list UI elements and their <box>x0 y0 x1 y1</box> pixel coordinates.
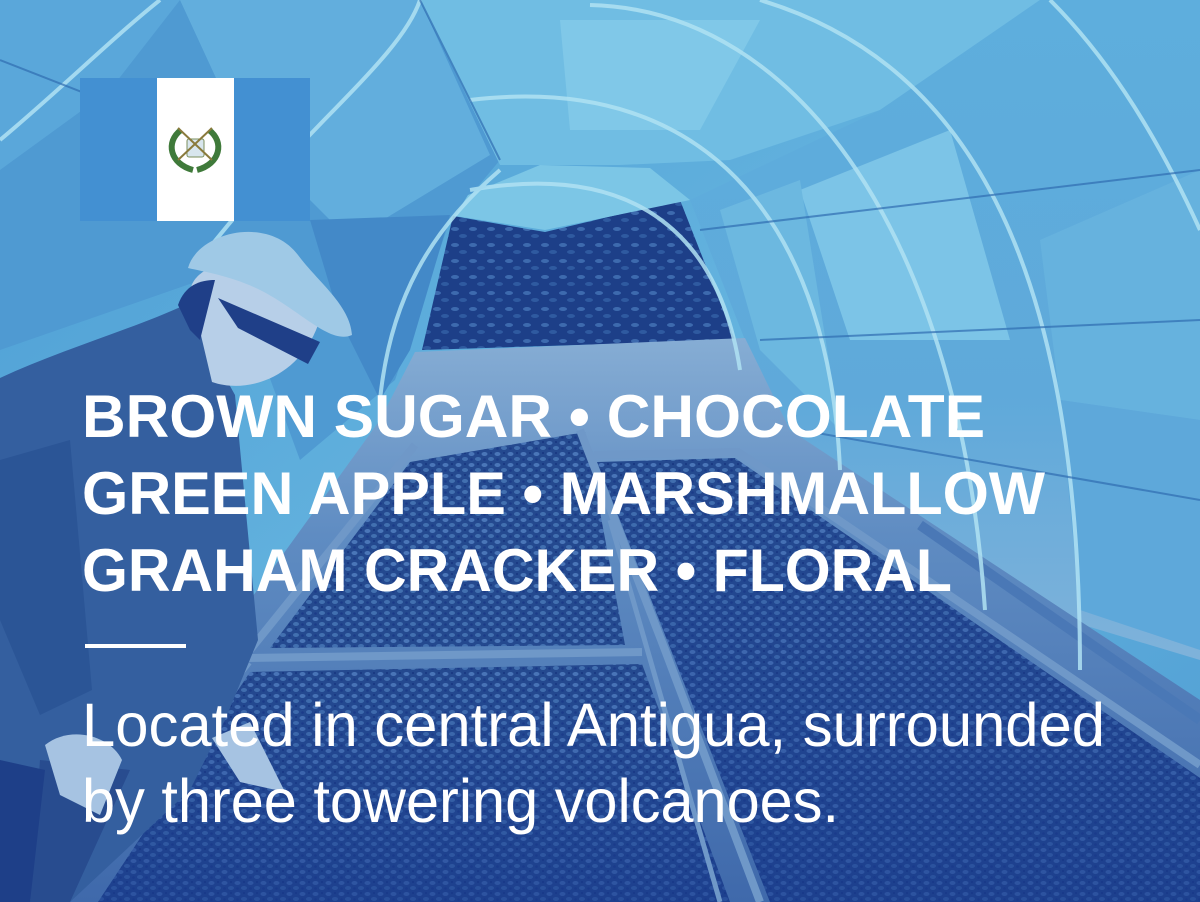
tunnel end opening with trees <box>422 200 735 350</box>
tunnel hoops <box>0 0 1200 670</box>
drying beds <box>270 432 625 648</box>
description text <box>82 691 1105 835</box>
bed frames <box>246 430 1200 902</box>
plastic tunnel right panels <box>690 0 1200 660</box>
flavor notes heading: GRAHAM CRACKER • FLORAL <box>82 537 952 604</box>
worker figure <box>0 232 352 902</box>
ground beyond the beds <box>60 338 1200 902</box>
icon: coat of arms <box>172 128 218 170</box>
divider line <box>85 644 186 648</box>
description text: Located in central Antigua, surrounded <box>82 691 1105 759</box>
flavor notes heading: GREEN APPLE • MARSHMALLOW <box>82 460 1045 527</box>
flag of Guatemala <box>80 78 310 221</box>
description text: by three towering volcanoes. <box>82 767 839 835</box>
plastic tunnel left panels <box>0 0 500 460</box>
flavor notes heading <box>82 383 1045 604</box>
flavor notes heading: BROWN SUGAR • CHOCOLATE <box>82 383 985 450</box>
plastic tunnel roof panels <box>420 0 1040 165</box>
